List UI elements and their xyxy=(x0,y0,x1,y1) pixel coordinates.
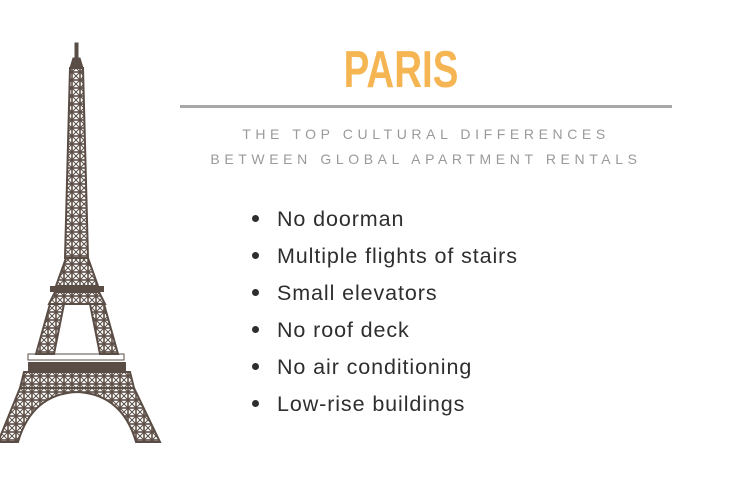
bullet list: Small elevators xyxy=(277,281,437,305)
subtitle: THE TOP CULTURAL DIFFERENCES xyxy=(242,126,610,142)
subtitle: BETWEEN GLOBAL APARTMENT RENTALS xyxy=(210,151,642,167)
bullet list: Low-rise buildings xyxy=(277,392,465,416)
bullet list: No doorman xyxy=(277,207,404,231)
bullet list: Multiple flights of stairs xyxy=(277,244,518,268)
subtitle xyxy=(210,126,642,167)
divider line xyxy=(180,105,672,108)
bullet list: No roof deck xyxy=(277,318,410,342)
bullet list xyxy=(252,207,518,416)
icon: eiffel tower xyxy=(0,42,162,443)
title: PARIS xyxy=(344,41,458,99)
bullet list: No air conditioning xyxy=(277,355,472,379)
